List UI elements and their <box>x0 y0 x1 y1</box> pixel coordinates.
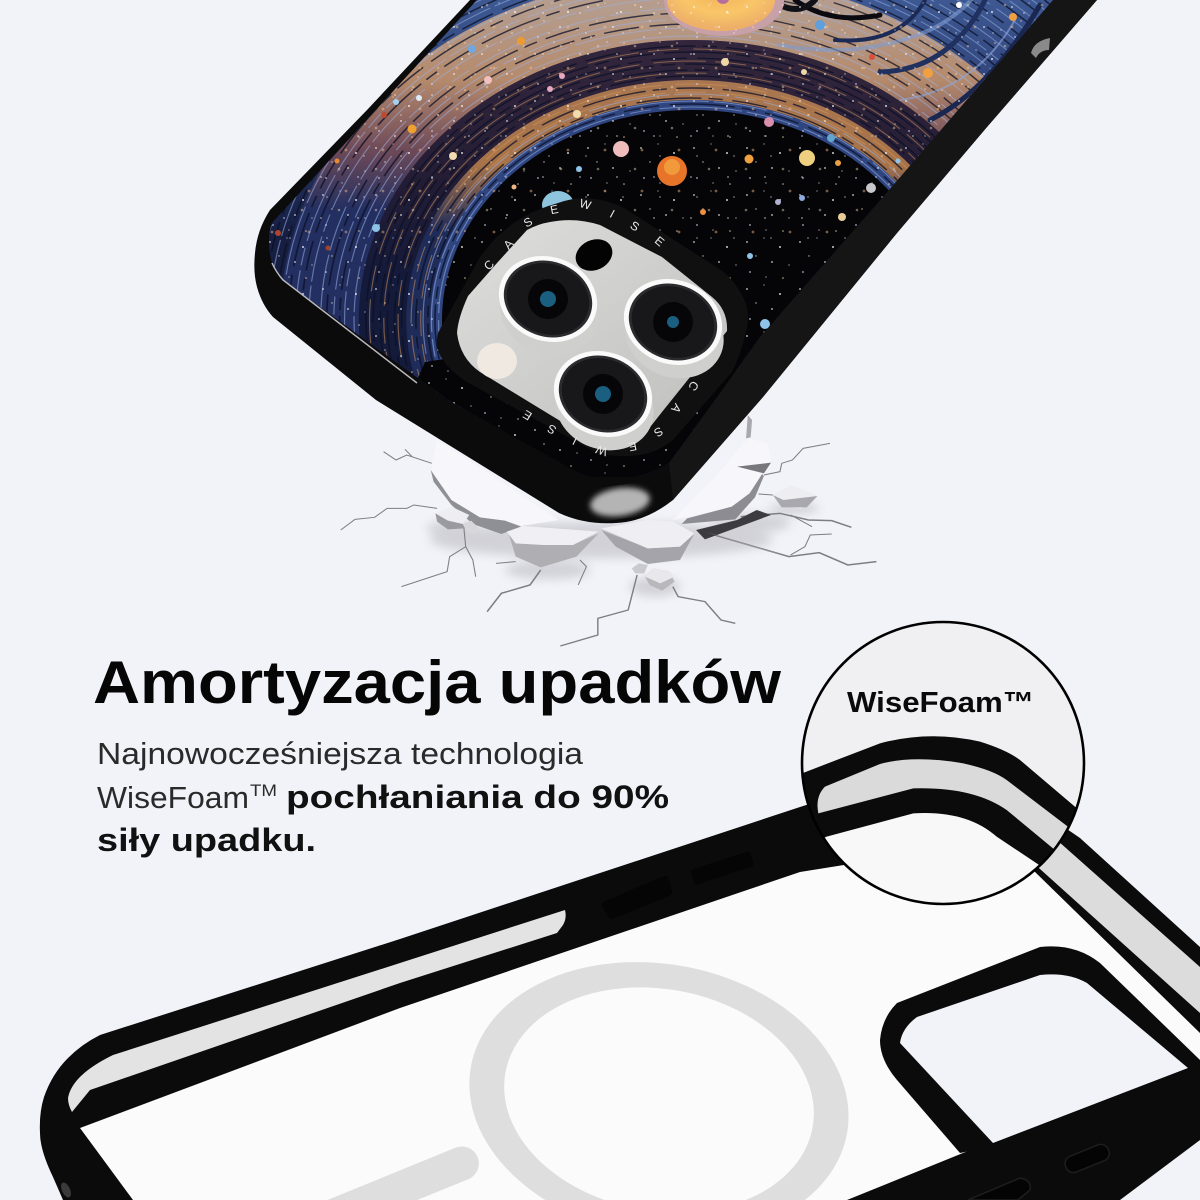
phone with space art case <box>254 0 1097 524</box>
heading: Amortyzacja upadków <box>93 649 781 716</box>
clear case <box>40 770 1200 1200</box>
left light strip <box>68 910 566 1112</box>
callout fill <box>802 622 1084 904</box>
bumper reflection <box>588 484 652 520</box>
sun <box>664 0 784 36</box>
camera cutout opening <box>900 974 1188 1143</box>
bottom pebbles <box>632 563 675 591</box>
right blue swirl <box>780 0 1040 120</box>
phone body <box>254 0 1097 523</box>
galaxy arcs <box>269 0 1053 410</box>
camera island <box>437 198 748 456</box>
left slab top <box>376 400 559 526</box>
left port <box>59 1181 73 1199</box>
lens 3 <box>538 337 670 464</box>
bottom ports <box>968 1142 1112 1200</box>
lens 1 <box>483 242 615 369</box>
casewise ring text bottom: CASEWISE <box>522 382 698 456</box>
silver camera plate <box>457 220 727 443</box>
body text <box>97 736 669 858</box>
magsafe pill <box>328 1146 479 1200</box>
body text: Najnowocześniejsza technologia <box>97 736 584 771</box>
flash <box>477 343 517 379</box>
magsafe ring <box>469 962 849 1200</box>
body text: siły upadku. <box>97 822 316 858</box>
casewise ring text top: CASEWISE <box>484 198 665 270</box>
body text: pochłaniania do 90% <box>286 779 669 815</box>
right pebble <box>773 485 817 508</box>
callout ring <box>802 622 1084 904</box>
body text: TM <box>250 781 277 800</box>
callout label: WiseFoam™ <box>847 687 1034 719</box>
centre right shard <box>601 520 694 564</box>
dust stars over arcs and dome <box>269 2 1030 476</box>
artwork <box>269 0 1053 476</box>
art edge highlight <box>272 263 417 383</box>
lens 2 <box>608 265 740 392</box>
planets <box>275 2 1017 329</box>
right side bumper <box>669 0 1097 500</box>
right light strip <box>1030 825 1200 1013</box>
side button highlight <box>1031 38 1050 58</box>
volume buttons <box>606 854 751 915</box>
small left shard <box>435 507 479 534</box>
magnifier callout: WiseFoam <box>780 622 1087 910</box>
body text: WiseFoam <box>97 780 249 815</box>
black starry dome <box>418 110 889 477</box>
crack shadow <box>426 502 819 597</box>
right slab <box>673 415 789 557</box>
clear interior <box>80 840 1200 1200</box>
camera cutout frame <box>880 946 1200 1153</box>
case frame <box>40 770 1200 1200</box>
cracked ground impact <box>341 400 876 646</box>
centre left shard <box>507 526 599 567</box>
magnified frame corner <box>804 736 1076 865</box>
camera hole <box>570 233 618 277</box>
crack lines <box>341 443 876 646</box>
left slab side <box>431 470 521 534</box>
